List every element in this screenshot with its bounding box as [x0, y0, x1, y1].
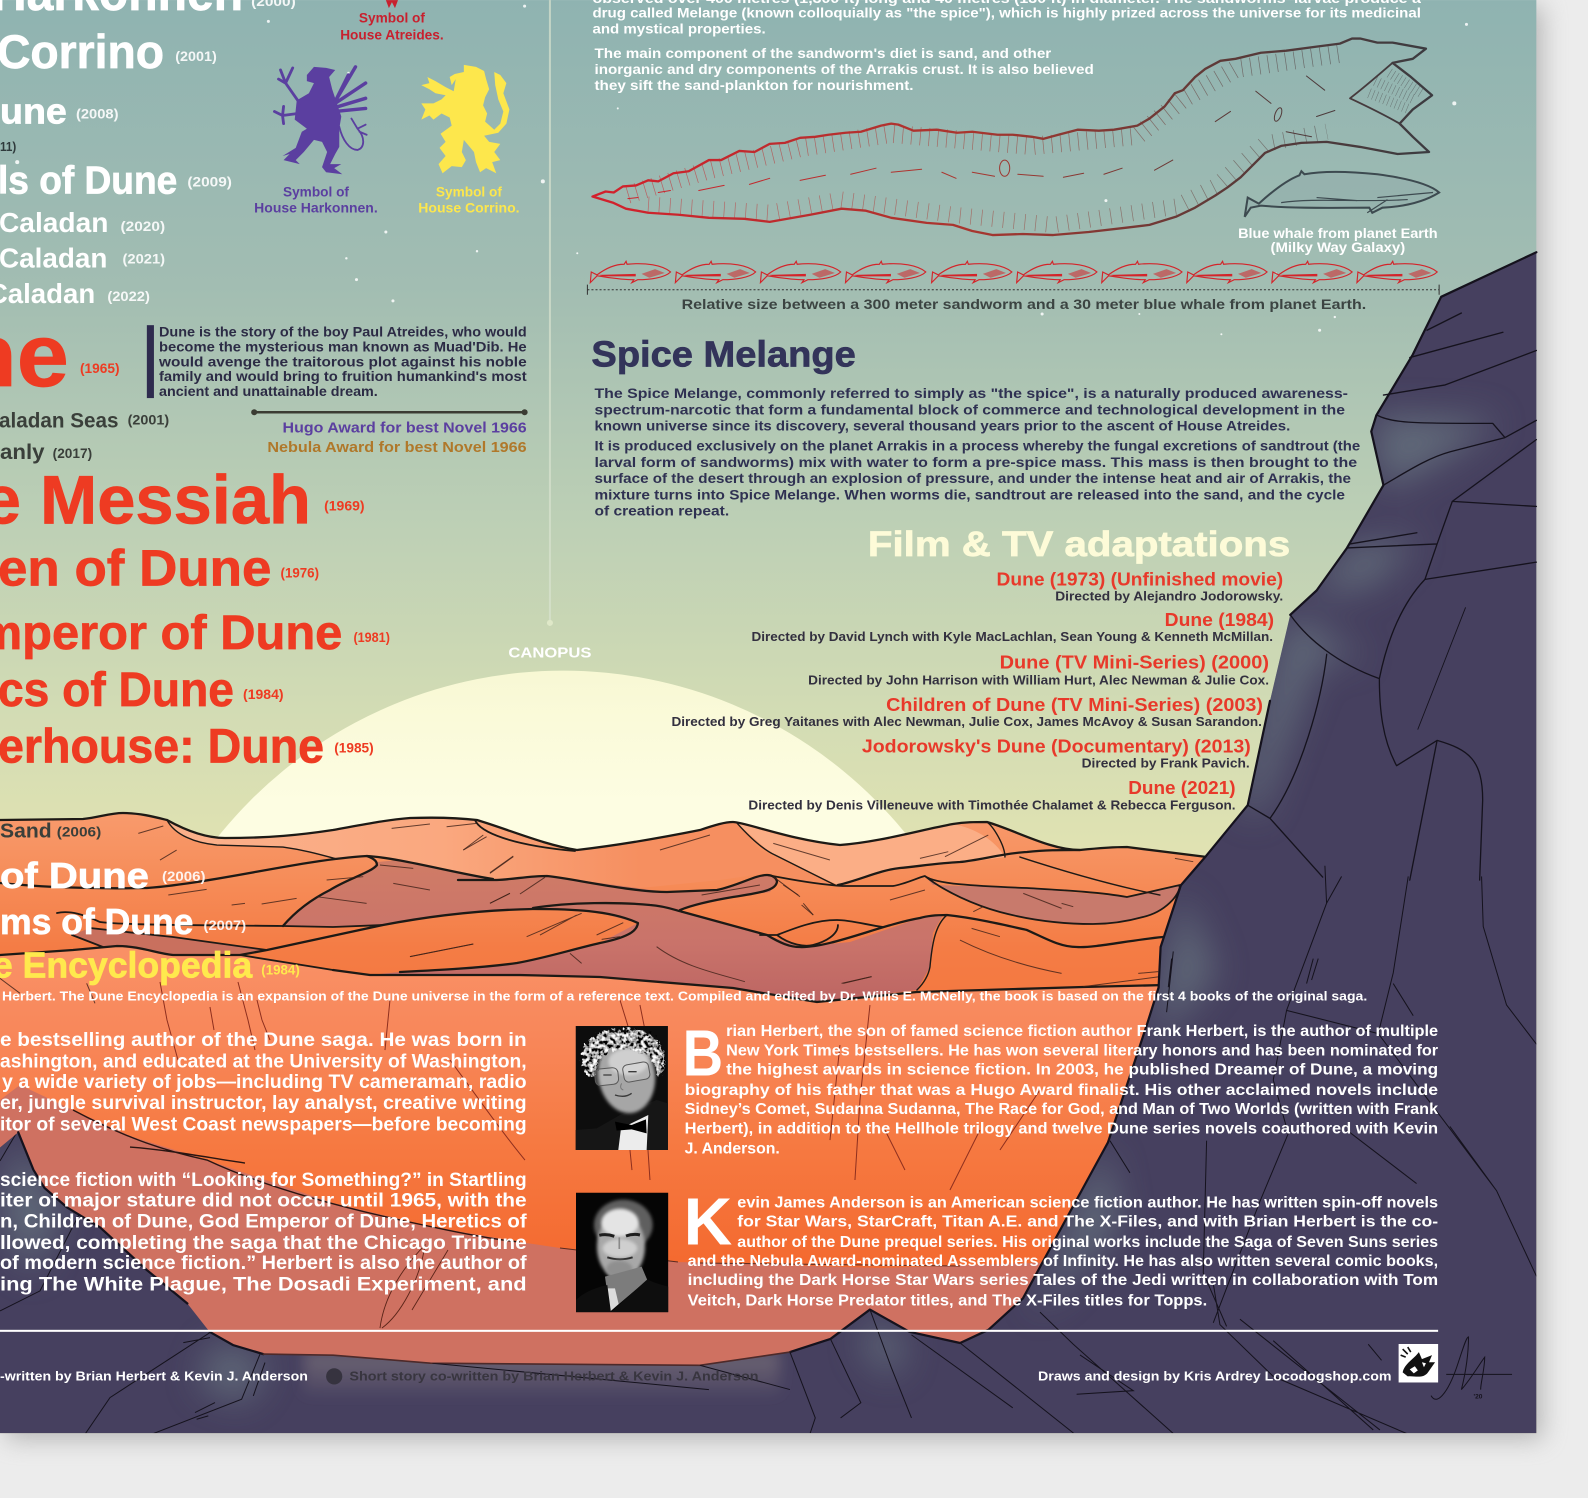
dune hatch marks centre [410, 835, 872, 983]
book list: prequels: (2021) [123, 251, 165, 267]
Dune synopsis [147, 324, 527, 399]
scale ruler and caption: Relative size between a 300 meter sandworm and a 30 meter blue whale from planet Earth. [682, 297, 1366, 312]
film list: Dune (TV Mini-Series) (2000) [1000, 652, 1269, 672]
book list: original saga: (1981) [353, 630, 390, 646]
book list: original saga: en of Dune [0, 539, 271, 596]
Frank Herbert biography: e bestselling author of the Dune saga. He was born in [0, 1030, 527, 1051]
Dune synopsis: become the mysterious man known as Muad'Dib. He [159, 339, 527, 354]
Kevin J. Anderson biography: evin James Anderson is an American science fiction author. He has written spin-off novels [737, 1194, 1438, 1211]
sandworm intro text: they sift the sand-plankton for nourishment. [594, 78, 914, 94]
desert cracks [160, 982, 1040, 1190]
Spice Melange body text: The Spice Melange, commonly referred to simply as "the spice", is a naturally produced awareness- [594, 386, 1348, 402]
Brian Herbert biography [683, 1017, 1438, 1158]
Dune synopsis: Dune is the story of the boy Paul Atreides, who would [159, 324, 527, 339]
icon: red hawk tail [386, 0, 398, 8]
sand dunes [0, 813, 1207, 1400]
book list: prequels: (2022) [107, 289, 150, 305]
rock light glow [0, 415, 1499, 1403]
rock cliffs [0, 252, 1537, 1434]
drop cap K: K [684, 1185, 732, 1260]
The Dune Encyclopedia: Herbert. The Dune Encyclopedia is an expansion of the Dune universe in the form of a reference text. Compiled and edited by Dr. Willis E. McNelly, the book is based on the first 4 books of the original saga. [2, 989, 1367, 1004]
Dune synopsis: ancient and unattainable dream. [159, 384, 378, 399]
book list: original saga: cs of Dune [0, 663, 234, 717]
rock crack lines lower left [0, 1133, 265, 1434]
The Dune Encyclopedia [0, 944, 1367, 1004]
Frank Herbert biography: n, Children of Dune, God Emperor of Dune, Heretics of [0, 1212, 527, 1233]
Dune synopsis: would avenge the traitorous plot against his noble [158, 355, 527, 370]
Spice Melange body text: larval form of sandworms) mix with water to form a pre-spice mass. This mass is then brought to the [594, 455, 1357, 471]
film list: Dune (1973) (Unfinished movie) [997, 569, 1283, 589]
Frank Herbert biography: er, jungle survival instructor, lay analyst, creative writing [0, 1093, 527, 1114]
book list: short stories: (2017) [53, 446, 92, 462]
book list: prequels: ls of Dune [0, 160, 177, 203]
mauve dune left [283, 860, 777, 927]
Frank Herbert biography: of modern science fiction.” Herbert is also the author of [0, 1253, 527, 1274]
The Dune Encyclopedia: (1984) [261, 962, 300, 978]
symbol of House Corrino: House Corrino. [418, 201, 520, 216]
rock crack lines bottom centre [432, 1310, 1074, 1433]
blue whale caption [1238, 226, 1438, 256]
book list: original saga: (1985) [334, 741, 374, 757]
book list: original saga: (1969) [324, 498, 365, 514]
sandworm intro text: inorganic and dry components of the Arrakis crust. It is also believed [594, 62, 1094, 78]
rock edge lines [18, 252, 1536, 1365]
footer: Short story co-written by Brian Herbert & Kevin J. Anderson [349, 1368, 759, 1383]
symbol of House Atreides [340, 0, 444, 43]
symbol of House Harkonnen [254, 67, 378, 216]
icon: lion [421, 65, 509, 173]
book list: original saga: (1984) [243, 687, 284, 703]
Kevin J. Anderson biography: Veitch, Dark Horse Predator titles, and The X-Files titles for Topps. [688, 1293, 1207, 1310]
stars [15, 5, 1468, 335]
Spice Melange body text: mixture turns into Spice Melange. When worms die, sandtrout are released into the sand, and the cycle [594, 487, 1345, 503]
Spice Melange body text: spectrum-narcotic that form a fundamental block of commerce and technological development in the [594, 402, 1345, 418]
symbol of House Atreides: House Atreides. [340, 28, 444, 43]
film list: Children of Dune (TV Mini-Series) (2003) [886, 695, 1263, 715]
dune hatch marks left [0, 823, 513, 1003]
Brian Herbert biography: J. Anderson. [685, 1141, 780, 1158]
book list: short stories: (2006) [57, 825, 102, 841]
worm skin hatching along belly [648, 132, 1327, 225]
symbol of House Harkonnen: Symbol of [283, 185, 349, 200]
sandworm intro text: and mystical properties. [592, 21, 766, 37]
film list: Directed by David Lynch with Kyle MacLachlan, Sean Young & Kenneth McMillan. [751, 630, 1273, 644]
dune highlight [167, 818, 833, 888]
Frank Herbert biography: y a wide variety of jobs—including TV cameraman, radio [2, 1072, 527, 1093]
book list: short stories: anly [0, 440, 45, 464]
book list: short stories: Sand [0, 821, 52, 843]
Brian Herbert biography: rian Herbert, the son of famed science fiction author Frank Herbert, is the author of multiple [726, 1023, 1438, 1040]
Brian Herbert biography: biography of his father that was a Hugo Award finalist. His other acclaimed novels include [685, 1082, 1438, 1099]
book list: original saga: (1976) [281, 565, 319, 581]
artist signature: '20 [1474, 1394, 1483, 1401]
sandworm intro text [592, 0, 1421, 94]
book list: prequels: (2009) [187, 174, 232, 190]
book list: short stories: (2001) [128, 412, 169, 428]
sun: Canopus [122, 671, 1005, 1112]
foreground mauve sand [0, 1085, 1100, 1400]
row of ten red whales [590, 261, 1437, 283]
book list: prequels: (2008) [76, 107, 119, 123]
book list: short stories [0, 408, 169, 843]
worm mouth [1350, 63, 1400, 124]
film list: Directed by John Harrison with William Hurt, Alec Newman & Julie Cox. [808, 674, 1269, 688]
rock crack lines (clipped to rock) [0, 866, 1537, 1434]
book list: prequels: Corrino [0, 26, 164, 79]
film list: Directed by Denis Villeneuve with Timothée Chalamet & Rebecca Ferguson. [748, 798, 1236, 812]
heading: Film and TV adaptations: Film & TV adaptations [868, 524, 1290, 564]
Spice Melange body text: surface of the desert through an explosion of pressure, and under the intense heat and air of Arrakis, the [594, 471, 1351, 487]
sandworm illustration [592, 39, 1432, 235]
dune highlight right [737, 823, 1005, 885]
book list: sequels: (2007) [204, 918, 246, 934]
book list: prequels: Caladan [0, 207, 108, 238]
lower desert floor [0, 940, 1200, 1380]
icon: griffin [274, 67, 367, 174]
Kevin J. Anderson biography: author of the Dune prequel series. His original works include the Saga of Seven Suns series [737, 1234, 1438, 1251]
awards: Hugo Award for best Novel 1966 [283, 421, 527, 437]
sandworm intro text: drug called Melange (known colloquially as "the spice"), which is highly prized across the universe for its medicinal [592, 5, 1421, 21]
footer: -written by Brian Herbert & Kevin J. Anderson [0, 1368, 308, 1383]
Brian Herbert biography: New York Times bestsellers. He has won several literary honors and has been nominated for [726, 1042, 1438, 1059]
blue whale illustration [1238, 171, 1439, 256]
worm skin hatching along back [628, 54, 1340, 195]
sandworm intro text: The main component of the sandworm's diet is sand, and other [594, 46, 1052, 62]
book list: original saga [0, 305, 390, 774]
Brian Herbert biography: Herbert), in addition to the Hellhole trilogy and twelve Dune series novels coauthored with Kevin [685, 1120, 1438, 1137]
book list: sequels: ms of Dune [0, 901, 193, 942]
mauve tongue right [925, 876, 1180, 924]
drop cap B: B [683, 1017, 723, 1090]
book list: original saga: (1965) [80, 361, 120, 377]
Frank Herbert biography [0, 1030, 527, 1295]
book list: prequels: (2020) [121, 219, 165, 235]
book list: short stories: aladan Seas [0, 408, 118, 432]
book list: prequels: une [0, 91, 67, 132]
Brian Herbert biography: Sidney’s Comet, Sudanna Sudanna, The Race for God, and Man of Two Worlds (written with Frank [685, 1101, 1438, 1118]
Frank Herbert biography: iter of major stature did not occur until 1965, with the [0, 1190, 527, 1211]
mauve dune far left [72, 928, 267, 955]
film list: Directed by Frank Pavich. [1082, 757, 1250, 771]
photo: Brian Herbert [576, 1026, 668, 1150]
awards [251, 409, 528, 456]
dune hatch marks right [773, 835, 1193, 987]
Spice Melange body text [594, 386, 1360, 520]
worm centre markings [628, 76, 1335, 199]
Spice Melange body text: of creation repeat. [594, 504, 729, 520]
blue whale caption: Blue whale from planet Earth [1238, 226, 1438, 242]
Kevin J. Anderson biography: for Star Wars, StarCraft, Titan A.E. and The X-Files, and with Brian Herbert is the co- [737, 1214, 1438, 1231]
Spice Melange body text: known universe since its discovery, several thousand years prior to the ascent of House Atreides. [594, 418, 1290, 434]
icon: Loco Dog logo [1399, 1344, 1438, 1382]
scale ruler and caption [587, 285, 1439, 312]
symbol of House Atreides: Symbol of [359, 10, 425, 25]
divider line to Canopus [547, 0, 553, 626]
film list: Dune (1984) [1165, 610, 1274, 630]
rock crack lines lower right [1040, 866, 1537, 1434]
Kevin J. Anderson biography [684, 1185, 1438, 1310]
awards: Nebula Award for best Novel 1966 [267, 440, 527, 456]
Frank Herbert biography: science fiction with “Looking for Something?” in Startling [0, 1170, 527, 1191]
upper dune mass [0, 813, 1207, 1002]
Frank Herbert biography: ashington, and educated at the University of Washington, [0, 1052, 527, 1073]
Kevin J. Anderson biography: and the Nebula Award-nominated Assemblers of Infinity. He has also written several comic books, [688, 1253, 1438, 1270]
mauve dune centre [370, 902, 943, 1002]
mauve boundary line [73, 1110, 520, 1242]
dune outlines [0, 813, 1207, 1002]
Dune synopsis: family and would bring to fruition humankind's most [159, 369, 527, 384]
blue whale caption: (Milky Way Galaxy) [1271, 240, 1405, 256]
symbol of House Harkonnen: House Harkonnen. [254, 201, 378, 216]
heading: Spice Melange: Spice Melange [591, 334, 856, 375]
book list: sequels: of Dune [0, 855, 149, 896]
Brian Herbert biography: the highest awards in science fiction. In 2003, he published Dreamer of Dune, a moving [726, 1062, 1438, 1079]
book list: sequels [0, 855, 246, 942]
book list: sequels: (2006) [162, 869, 206, 885]
film list: Directed by Alejandro Jodorowsky. [1055, 590, 1283, 604]
footer: Draws and design by Kris Ardrey Locodogshop.com [1038, 1368, 1392, 1383]
Frank Herbert biography: ing The White Plague, The Dosadi Experiment, and [0, 1274, 527, 1295]
artist signature [1431, 1337, 1512, 1401]
book list: prequels: Caladan [0, 242, 107, 273]
Frank Herbert biography: llowed, completing the saga that the Chicago Tribune [0, 1233, 527, 1254]
Canopus label: CANOPUS [508, 644, 591, 661]
book list: prequels: (2001) [175, 49, 217, 65]
Frank Herbert biography: itor of several West Coast newspapers—before becoming [0, 1114, 527, 1135]
footer [0, 1330, 1512, 1401]
symbol of House Corrino [418, 65, 520, 216]
film list: Jodorowsky's Dune (Documentary) (2013) [862, 737, 1251, 757]
film list: Dune (2021) [1128, 778, 1236, 798]
book list: original saga: erhouse: Dune [0, 720, 324, 774]
Kevin J. Anderson biography: including the Dark Horse Star Wars series Tales of the Jedi written in collaboration with Tom [688, 1272, 1438, 1289]
symbol of House Corrino: Symbol of [436, 185, 502, 200]
Spice Melange body text: It is produced exclusively on the planet Arrakis in a process whereby the fungal excretions of sandtrout (the [594, 439, 1360, 455]
film list: Directed by Greg Yaitanes with Alec Newman, Julie Cox, James McAvoy & Susan Sarandon. [671, 715, 1262, 729]
book list: prequels [0, 0, 296, 309]
The Dune Encyclopedia: e Encyclopedia [0, 944, 253, 985]
photo: Kevin J. Anderson [576, 1193, 668, 1312]
film list [671, 569, 1283, 812]
book list: prequels: 11) [0, 139, 16, 154]
small leaf crack [380, 1245, 448, 1328]
